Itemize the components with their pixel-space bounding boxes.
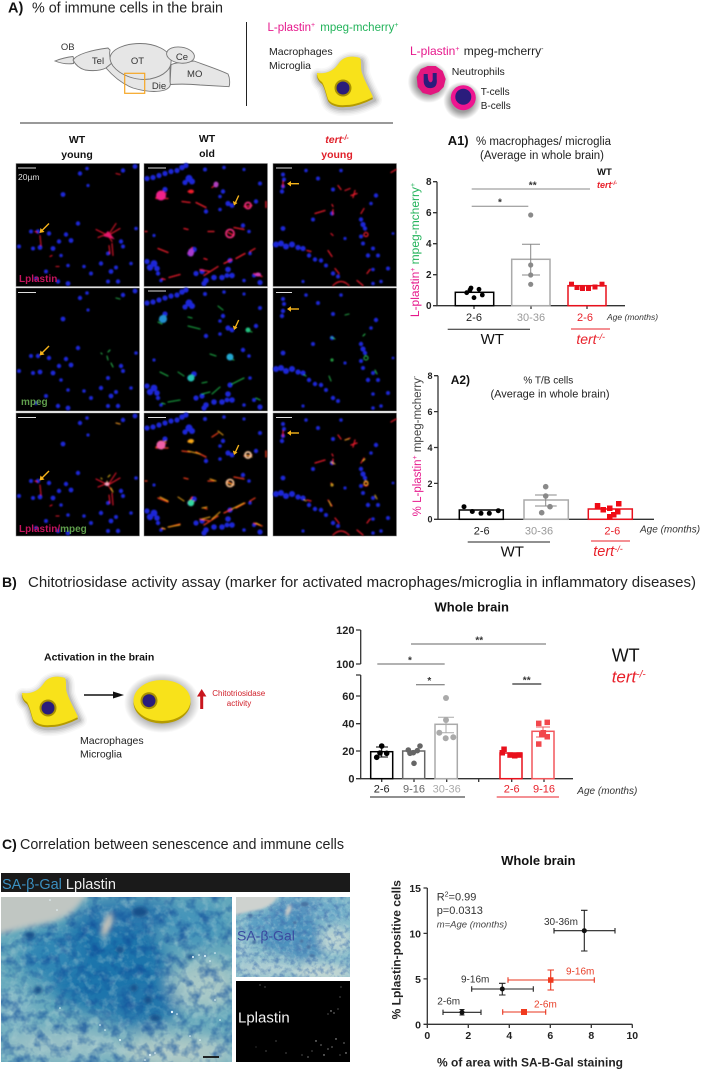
chart A1 legend — [597, 167, 617, 190]
icon: T and B cell — [443, 82, 481, 120]
scatter axes — [424, 888, 632, 1028]
micrograph: WT old mpeg — [144, 287, 268, 411]
legend: neutrophils and lymphocytes: B-cells — [481, 101, 511, 112]
brain labels: OB — [61, 42, 75, 53]
bar chart B: 0 — [348, 774, 354, 786]
legend: macrophages and microglia: Macrophages — [269, 46, 333, 58]
scatter chart: 9-16m — [566, 966, 594, 977]
icon: neutrophil — [408, 61, 450, 103]
micrograph: WT young Lplastin: Lplastin — [19, 274, 57, 285]
arrow: chitotriosidase up — [197, 689, 206, 709]
bar chart B: 20 — [342, 746, 354, 758]
bars A2 — [459, 510, 503, 519]
y axis label A1: + — [410, 183, 417, 187]
inset: Lplastin — [236, 981, 350, 1062]
bar chart A2: 4 — [427, 443, 432, 453]
y axis A1 — [433, 182, 625, 309]
chart A1 legend: -/- — [612, 181, 617, 187]
bar chart B: Age (months) — [576, 786, 637, 797]
brain schematic — [55, 42, 230, 93]
bar chart A2 — [412, 371, 700, 561]
legend: neutrophils and lymphocytes: L-plastin — [410, 44, 455, 58]
bar chart B: ** — [475, 636, 483, 646]
data points A1 — [464, 286, 485, 300]
y axis label A2: mpeg-mcherry — [412, 378, 424, 455]
scatter chart: 6 — [547, 1030, 553, 1042]
statistics note — [437, 892, 507, 931]
point labels: 30-36m — [544, 917, 578, 928]
micrograph column headings: young — [321, 149, 353, 161]
scatter chart: 0 — [424, 1030, 430, 1042]
tick labels B: 30-36 — [433, 784, 461, 796]
brain labels — [61, 42, 202, 92]
activation diagram: Chitotriosidase — [212, 689, 266, 698]
scatter title: Whole brain — [501, 853, 576, 868]
data points A2 — [462, 504, 501, 516]
activation diagram: Macrophages — [80, 735, 144, 747]
heading A1: % macrophages/ microglia — [476, 136, 612, 148]
activation diagram — [22, 652, 266, 760]
bar chart A2: tert — [593, 544, 614, 560]
micrograph column headings: old — [199, 148, 215, 160]
icon: yellow macrophage cell — [317, 57, 374, 108]
tick labels B: 2-6 — [374, 784, 390, 796]
micrograph column headings: WT — [199, 133, 216, 145]
chart A1 legend: tert — [597, 180, 612, 190]
black legend bar — [1, 873, 350, 893]
tick labels A1: 2-6 — [577, 312, 593, 324]
brain labels: MO — [187, 69, 202, 80]
y axis label A2: - — [412, 375, 419, 378]
legend: macrophages and microglia: + — [311, 22, 315, 29]
legend: neutrophils and lymphocytes: T-cells — [481, 87, 510, 98]
bar chart A1: 8 — [426, 177, 432, 188]
inset: SA-beta-Gal: SA-β-Gal — [237, 928, 295, 944]
micrograph: WT old Lplastin — [144, 163, 268, 286]
y axis label A1: mpeg-mcherry — [408, 187, 422, 268]
activation diagram: activity — [227, 699, 251, 708]
white specks — [49, 899, 221, 1061]
significance B — [377, 644, 546, 685]
legend: macrophages and microglia: Microglia — [269, 60, 311, 72]
brain region: Tel — [73, 48, 112, 71]
bar chart B: 120 — [336, 625, 354, 637]
micrograph: WT young Lplastin — [16, 164, 140, 286]
bar chart A1: tert — [576, 331, 597, 347]
bar chart A2: -/- — [614, 544, 623, 554]
bar chart A2: 2 — [427, 479, 432, 489]
legend: macrophages and microglia: + — [394, 22, 398, 29]
significance A1 — [472, 189, 590, 206]
arrow: activation — [84, 692, 124, 698]
tick labels B: 9-16 — [533, 784, 555, 796]
bar chart A1: 0 — [426, 301, 432, 312]
bar chart B: 40 — [342, 719, 354, 731]
scatter chart: 0 — [415, 1019, 421, 1031]
scatter y axis label: % Lplastin-positive cells — [390, 880, 404, 1019]
bar chart B: * — [408, 656, 412, 666]
y axis label A1: L-plastin — [408, 272, 422, 317]
icon: resting macrophage — [22, 677, 79, 728]
micrograph: WT old merged — [144, 412, 268, 536]
micrograph column headings: young — [61, 149, 93, 161]
bar chart B: 60 — [342, 691, 354, 703]
bar chart A1 — [408, 177, 658, 348]
bar chart A1: 6 — [426, 208, 432, 219]
tick labels A1 — [466, 312, 593, 324]
bar chart A1: 2 — [426, 270, 432, 281]
micrograph grid — [16, 163, 396, 536]
bar chart A2: Age (months) — [639, 525, 700, 536]
legend: macrophages and microglia: mpeg-mcherry — [317, 22, 395, 34]
heading A2: A2) — [451, 373, 470, 387]
scatter chart: 2-6m — [534, 1000, 557, 1011]
scatter chart — [390, 853, 638, 1070]
section C heading: C) — [2, 836, 17, 852]
heading A2: (Average in whole brain) — [490, 389, 610, 401]
brain region: MO — [170, 61, 230, 87]
bar chart A1: ** — [529, 180, 537, 192]
micrograph column headings: WT — [69, 134, 86, 146]
point labels — [437, 917, 578, 1008]
inset: SA-beta-Gal — [236, 897, 350, 977]
micrograph column headings: -/- — [342, 135, 349, 142]
scatter chart: 10 — [409, 928, 421, 940]
micrograph column headings — [61, 133, 353, 161]
tick labels A2: 30-36 — [525, 525, 553, 537]
broken axes B — [356, 630, 573, 782]
black legend bar: SA-β-Gal Lplastin — [2, 877, 116, 893]
point labels: 2-6m — [437, 997, 460, 1008]
bar chart A1: WT — [481, 331, 504, 348]
bar chart B — [336, 625, 637, 797]
bar chart A1: 4 — [426, 239, 432, 250]
section A heading: A) — [8, 0, 23, 16]
statistics note: R — [437, 892, 445, 904]
bar chart B: ** — [523, 676, 531, 686]
micrograph: tert young merged — [273, 413, 396, 536]
micrograph: WT young mpeg: mpeg — [21, 397, 48, 408]
micrograph: WT young Lplastin: 20µm — [18, 172, 39, 182]
micrograph: WT young merged: Lplastin/mpeg — [19, 524, 87, 535]
tick labels A1: 30-36 — [517, 312, 545, 324]
red series — [503, 970, 594, 1015]
icon: activated macrophage — [124, 673, 200, 733]
brain labels: Ce — [176, 52, 188, 63]
section B heading: B) — [2, 574, 17, 590]
brain region: OB — [55, 56, 74, 64]
legend: neutrophils and lymphocytes: - — [541, 46, 544, 53]
heading A1: A1) — [448, 133, 469, 148]
inset: Lplastin: Lplastin — [238, 1010, 290, 1027]
heading A1 — [448, 133, 612, 162]
micrograph: WT young merged — [16, 413, 140, 536]
legend: neutrophils and lymphocytes: + — [455, 46, 459, 53]
bar chart A2: 0 — [427, 514, 432, 524]
micrograph: tert young mpeg — [273, 288, 396, 411]
legend: neutrophils and lymphocytes — [408, 44, 544, 120]
legend: macrophages and microglia: L-plastin — [268, 22, 311, 34]
scatter chart: 15 — [409, 883, 421, 895]
micrograph column headings: tert — [325, 134, 342, 146]
chart B legend: WT — [612, 646, 640, 666]
statistics note: 2 — [445, 892, 449, 899]
scatter chart: 4 — [506, 1030, 512, 1042]
chart B legend: -/- — [636, 670, 646, 681]
section C heading: Correlation between senescence and immune cells — [20, 836, 344, 853]
statistics note: p=0.0313 — [437, 905, 483, 917]
data points B — [376, 747, 388, 757]
bar chart B: 100 — [336, 659, 354, 671]
chart B title: Whole brain — [435, 600, 509, 615]
scatter chart: 8 — [588, 1030, 594, 1042]
brain labels: Die — [152, 81, 166, 92]
micrograph: tert young Lplastin — [273, 164, 396, 286]
section A heading: % of immune cells in the brain — [32, 0, 223, 16]
y axis label A2: + — [412, 455, 419, 459]
point labels: 9-16m — [461, 974, 489, 985]
tick labels B: 9-16 — [403, 784, 425, 796]
bar chart A2: 6 — [427, 407, 432, 417]
scatter chart: 10 — [626, 1030, 638, 1042]
tick labels A2: 2-6 — [474, 525, 490, 537]
legend: macrophages and microglia — [268, 22, 398, 108]
bar chart B: * — [427, 676, 431, 687]
chart B legend — [612, 646, 646, 687]
micrograph: WT young mpeg — [16, 288, 140, 411]
heading A2 — [451, 373, 610, 401]
legend: neutrophils and lymphocytes: mpeg-mcherry — [460, 44, 541, 58]
tick labels A2 — [474, 525, 620, 537]
tick labels B — [374, 784, 555, 796]
legend: neutrophils and lymphocytes: Neutrophils — [452, 66, 505, 78]
bars A1 — [455, 292, 494, 306]
activation diagram: Microglia — [80, 748, 122, 760]
activation diagram: Activation in the brain — [44, 652, 154, 664]
bar chart A2: 8 — [427, 371, 432, 381]
section B heading: Chitotriosidase activity assay (marker for activated macrophages/microglia in inflammatory diseases) — [28, 575, 696, 591]
y axis label A2: % L-plastin — [412, 459, 424, 516]
bars B — [371, 752, 393, 779]
brain region: Die — [106, 63, 170, 91]
chart B legend: tert — [612, 668, 636, 687]
stained section image — [1, 897, 232, 1062]
tick labels A2: 2-6 — [604, 525, 620, 537]
sampled area box — [125, 73, 145, 93]
bar chart A2: WT — [501, 544, 524, 561]
heading A2: % T/B cells — [523, 375, 573, 386]
tick labels A1: 2-6 — [466, 312, 482, 324]
brain region: OT — [110, 44, 171, 79]
brain region: Ce — [166, 45, 195, 65]
tick labels B: 2-6 — [504, 784, 520, 796]
bar chart A1: Age (months) — [606, 312, 658, 322]
bar chart A1: * — [498, 198, 502, 208]
bar chart A1: -/- — [597, 332, 605, 342]
scatter chart: 5 — [415, 974, 421, 986]
scatter x axis label: % of area with SA-B-Gal staining — [437, 1056, 623, 1070]
axes A2 — [434, 376, 654, 519]
brain labels: Tel — [92, 56, 104, 67]
chart A1 legend: WT — [597, 167, 612, 178]
brain labels: OT — [131, 56, 144, 67]
statistics note: =0.99 — [449, 892, 476, 904]
black series — [443, 910, 615, 1015]
statistics note: m=Age (months) — [437, 920, 507, 931]
divider — [246, 22, 248, 106]
y axis label A1: + — [410, 268, 417, 272]
heading A1: (Average in whole brain) — [480, 150, 604, 162]
scatter chart: 2 — [465, 1030, 471, 1042]
